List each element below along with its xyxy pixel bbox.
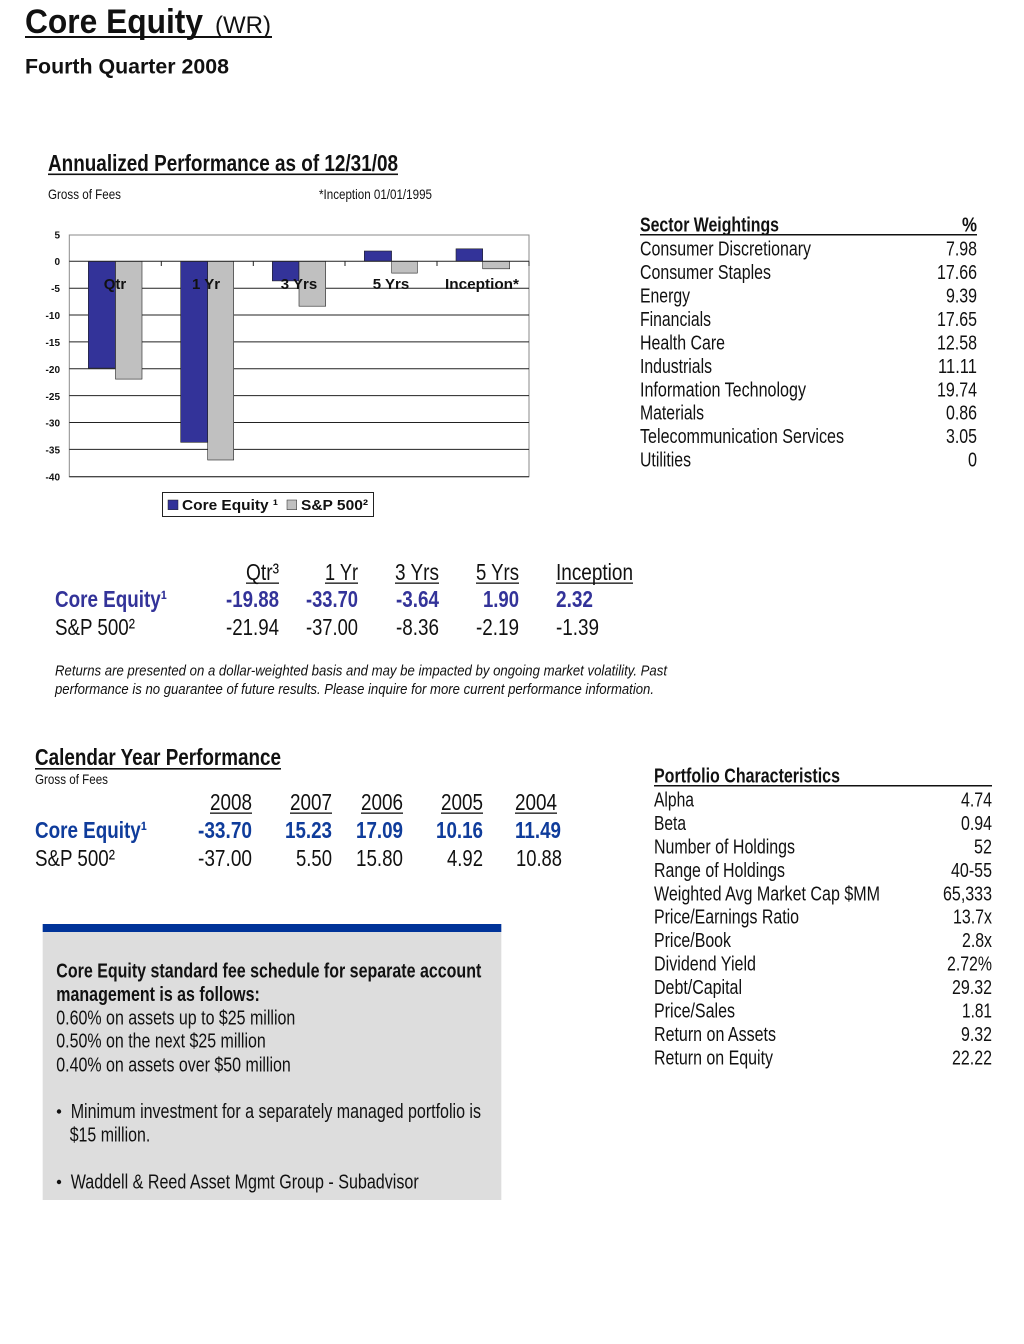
table: portfolio characteristics: 9.32 <box>961 1024 992 1046</box>
table: sector weightings: Telecommunication Services <box>640 426 844 448</box>
bars: S&P 500 <box>116 261 510 460</box>
disclaimer text <box>54 662 668 698</box>
table: portfolio characteristics: Return on Equity <box>654 1047 773 1069</box>
table: annualized returns: -2.19 <box>476 614 519 640</box>
table: calendar year returns: -37.00 <box>198 845 252 871</box>
table: portfolio characteristics: 2.72% <box>947 954 992 976</box>
bar chart: annualized performance <box>46 230 529 484</box>
table: calendar year returns: -33.70 <box>198 817 252 843</box>
table: sector weightings: 17.66 <box>937 262 977 284</box>
heading: calendar year performance: Calendar Year Performance <box>35 744 281 770</box>
fee tiers: 0.50% on the next $25 million <box>56 1031 266 1053</box>
table: annualized returns: -1.39 <box>556 614 599 640</box>
table: sector weightings: 12.58 <box>937 332 977 354</box>
table: sector weightings: 17.65 <box>937 309 977 331</box>
title: Core Equity <box>25 3 203 41</box>
table: sector weightings: Consumer Discretionary <box>640 238 811 260</box>
category labels: 5 Yrs <box>373 276 409 293</box>
table: calendar year returns: 10.16 <box>436 817 483 843</box>
table: sector weightings: % <box>962 215 977 237</box>
table: portfolio characteristics: 22.22 <box>952 1047 992 1069</box>
table: sector weightings: 19.74 <box>937 379 977 401</box>
table: sector weightings: 9.39 <box>946 286 977 308</box>
table: portfolio characteristics: 4.74 <box>961 790 992 812</box>
table: annualized returns: 1.90 <box>483 586 519 612</box>
table: portfolio characteristics: 13.7x <box>953 907 992 929</box>
chart legend <box>162 492 374 516</box>
table: portfolio characteristics: 65,333 <box>943 883 992 905</box>
table: portfolio characteristics: Price/Book <box>654 930 732 952</box>
table: portfolio characteristics: 0.94 <box>961 813 992 835</box>
table: sector weightings: Industrials <box>640 356 712 378</box>
fee schedule heading: Core Equity standard fee schedule for separate account <box>56 960 482 982</box>
table: calendar year returns <box>35 789 562 871</box>
table: annualized returns: -33.70 <box>306 586 358 612</box>
table: calendar year returns: 2007 <box>290 789 332 815</box>
fee schedule heading <box>56 960 482 1006</box>
axis labels: -10 <box>46 311 60 322</box>
table: calendar year returns: Core Equity¹ <box>35 817 147 843</box>
bullet: minimum investment: Minimum investment for a separately managed portfolio is <box>71 1101 481 1123</box>
table: annualized returns: -37.00 <box>306 614 358 640</box>
table: annualized returns: -19.88 <box>226 586 279 612</box>
table: sector weightings: Consumer Staples <box>640 262 771 284</box>
subtitle: quarter: Fourth Quarter 2008 <box>25 56 229 78</box>
axis labels: -15 <box>46 338 60 349</box>
table: annualized returns: -21.94 <box>226 614 279 640</box>
category labels <box>104 276 519 293</box>
table: calendar year returns: 17.09 <box>356 817 403 843</box>
axis labels: -25 <box>46 392 60 403</box>
bars: core equity <box>88 249 483 442</box>
table: calendar year returns: S&P 500² <box>35 845 115 871</box>
table: calendar year returns: 2008 <box>210 789 252 815</box>
table: calendar year returns: 2006 <box>361 789 403 815</box>
table: annualized returns: Qtr³ <box>246 559 279 585</box>
axis labels: -30 <box>46 418 60 430</box>
table: sector weightings: 3.05 <box>946 426 977 448</box>
note: inception date: *Inception 01/01/1995 <box>319 186 432 202</box>
title: (WR) <box>215 12 271 39</box>
table: portfolio characteristics: Price/Sales <box>654 1000 735 1022</box>
table: calendar year returns: 15.23 <box>285 817 332 843</box>
table: annualized returns: Core Equity¹ <box>55 586 167 612</box>
fee tiers: 0.40% on assets over $50 million <box>56 1054 291 1076</box>
table: sector weightings: Information Technology <box>640 379 806 401</box>
table: annualized returns: 2.32 <box>556 586 593 612</box>
table: portfolio characteristics: Alpha <box>654 790 695 812</box>
axis labels: -20 <box>46 365 60 376</box>
table: calendar year returns: 15.80 <box>356 845 403 871</box>
fee tiers <box>56 1007 295 1076</box>
disclaimer text: performance is no guarantee of future results. Please inquire for more current performance information. <box>54 681 654 698</box>
chart legend: S&P 500² <box>301 497 368 514</box>
table: portfolio characteristics: Return on Assets <box>654 1024 776 1046</box>
table: sector weightings: 7.98 <box>946 238 977 260</box>
chart legend: Core Equity ¹ <box>182 497 278 514</box>
table: annualized returns: Inception <box>556 559 633 585</box>
table: portfolio characteristics: Dividend Yield <box>654 954 756 976</box>
table: sector weightings: Energy <box>640 286 690 308</box>
table: portfolio characteristics: 29.32 <box>952 977 992 999</box>
table: calendar year returns: 2005 <box>441 789 483 815</box>
table: annualized returns: 1 Yr <box>325 559 358 585</box>
axis labels <box>46 230 60 484</box>
table: portfolio characteristics <box>654 766 992 1069</box>
table: calendar year returns: 2004 <box>515 789 557 815</box>
axis labels: 0 <box>54 257 60 268</box>
axis labels: -40 <box>46 472 60 484</box>
table: portfolio characteristics: Beta <box>654 813 687 835</box>
table: sector weightings: Financials <box>640 309 711 331</box>
table: sector weightings: Utilities <box>640 450 691 472</box>
category labels: 1 Yr <box>192 276 220 293</box>
category labels: 3 Yrs <box>281 276 317 293</box>
table: sector weightings: 0 <box>968 450 977 472</box>
table: sector weightings: Health Care <box>640 332 725 354</box>
table: portfolio characteristics: Portfolio Characteristics <box>654 766 840 788</box>
axis labels: -5 <box>51 284 60 295</box>
table: annualized returns: S&P 500² <box>55 614 135 640</box>
note: gross of fees: Gross of Fees <box>48 186 121 202</box>
table: portfolio characteristics: Weighted Avg Market Cap $MM <box>654 883 880 905</box>
table: sector weightings <box>640 215 977 471</box>
table: portfolio characteristics: 52 <box>974 836 992 858</box>
fee tiers: 0.60% on assets up to $25 million <box>56 1007 295 1029</box>
table: annualized returns: 5 Yrs <box>476 559 519 585</box>
bullet: minimum investment: $15 million. <box>70 1125 150 1147</box>
table: sector weightings: Materials <box>640 403 704 425</box>
table: annualized returns <box>55 559 633 640</box>
panel: fee schedule <box>43 924 501 1200</box>
note: gross of fees: Gross of Fees <box>35 771 108 787</box>
category labels: Inception* <box>445 276 519 293</box>
table: portfolio characteristics: Number of Holdings <box>654 836 795 858</box>
axis labels: -35 <box>46 446 60 456</box>
table: portfolio characteristics: 2.8x <box>962 930 992 952</box>
table: calendar year returns: 4.92 <box>447 845 483 871</box>
fee schedule heading: management is as follows: <box>56 984 260 1006</box>
table: portfolio characteristics: Range of Holdings <box>654 860 785 882</box>
table: annualized returns: -8.36 <box>396 614 439 640</box>
table: sector weightings: Sector Weightings <box>640 215 779 237</box>
table: portfolio characteristics: 1.81 <box>962 1000 992 1022</box>
table: portfolio characteristics: 40-55 <box>951 860 992 882</box>
bullet: minimum investment <box>57 1101 481 1147</box>
table: calendar year returns: 10.88 <box>516 845 562 871</box>
category labels: Qtr <box>104 276 126 293</box>
bullet: subadvisor: Waddell & Reed Asset Mgmt Group - Subadvisor <box>71 1171 419 1193</box>
table: annualized returns: -3.64 <box>396 586 439 612</box>
table: portfolio characteristics: Debt/Capital <box>654 977 742 999</box>
table: sector weightings: 0.86 <box>946 403 977 425</box>
table: calendar year returns: 11.49 <box>515 817 561 843</box>
heading: annualized performance: Annualized Performance as of 12/31/08 <box>48 150 398 176</box>
table: portfolio characteristics: Price/Earnings Ratio <box>654 907 799 929</box>
disclaimer text: Returns are presented on a dollar-weighted basis and may be impacted by ongoing market volatility. Past <box>55 662 668 680</box>
table: sector weightings: 11.11 <box>938 356 977 378</box>
axis labels: 5 <box>54 230 60 242</box>
table: annualized returns: 3 Yrs <box>395 559 439 585</box>
table: calendar year returns: 5.50 <box>296 845 332 871</box>
